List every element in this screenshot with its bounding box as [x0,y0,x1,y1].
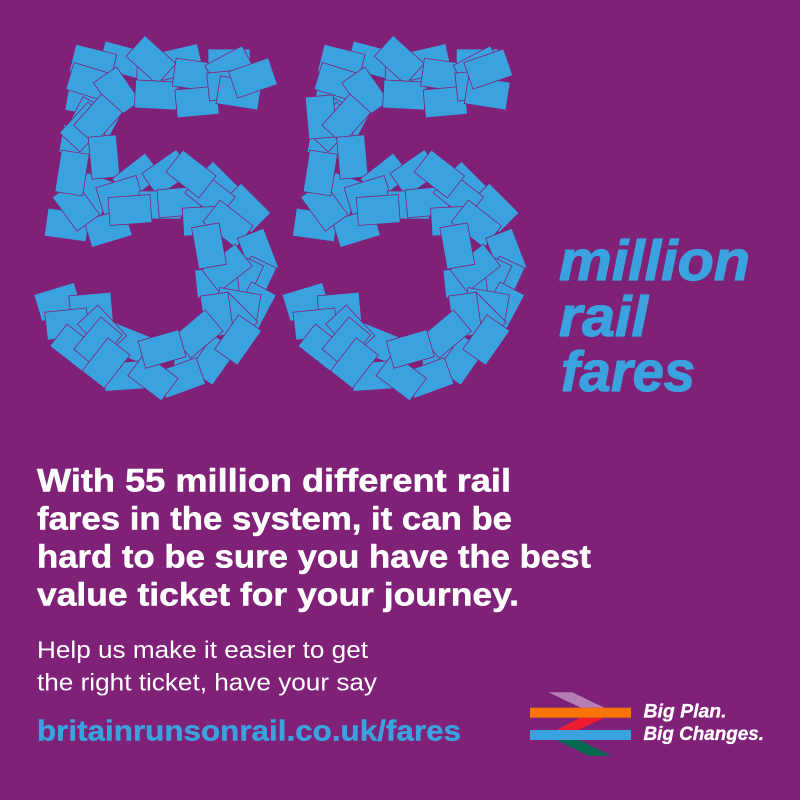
label: million rail fares [559,229,750,404]
label: million rail fares: rail [559,285,649,349]
headline text block [37,462,591,612]
headline text block: With 55 million different rail [37,462,511,498]
big number: second 5 made of tickets [282,36,527,401]
logo tagline: Big Changes. [644,724,764,745]
label: million rail fares: fares [561,340,695,404]
big number: first 5 made of tickets [34,36,279,401]
headline text block: hard to be sure you have the best [37,538,591,574]
call to action text [37,637,377,696]
headline text block: fares in the system, it can be [37,500,512,536]
call to action text: the right ticket, have your say [37,670,377,696]
logo tagline [644,702,764,745]
label: million rail fares: million [559,229,750,293]
headline text block: value ticket for your journey. [37,576,519,612]
call to action text: Help us make it easier to get [37,637,368,664]
logo tagline: Big Plan. [644,702,726,722]
website url: britainrunsonrail.co.uk/fares [37,716,461,748]
icon: double arrow rail logo [530,692,631,756]
